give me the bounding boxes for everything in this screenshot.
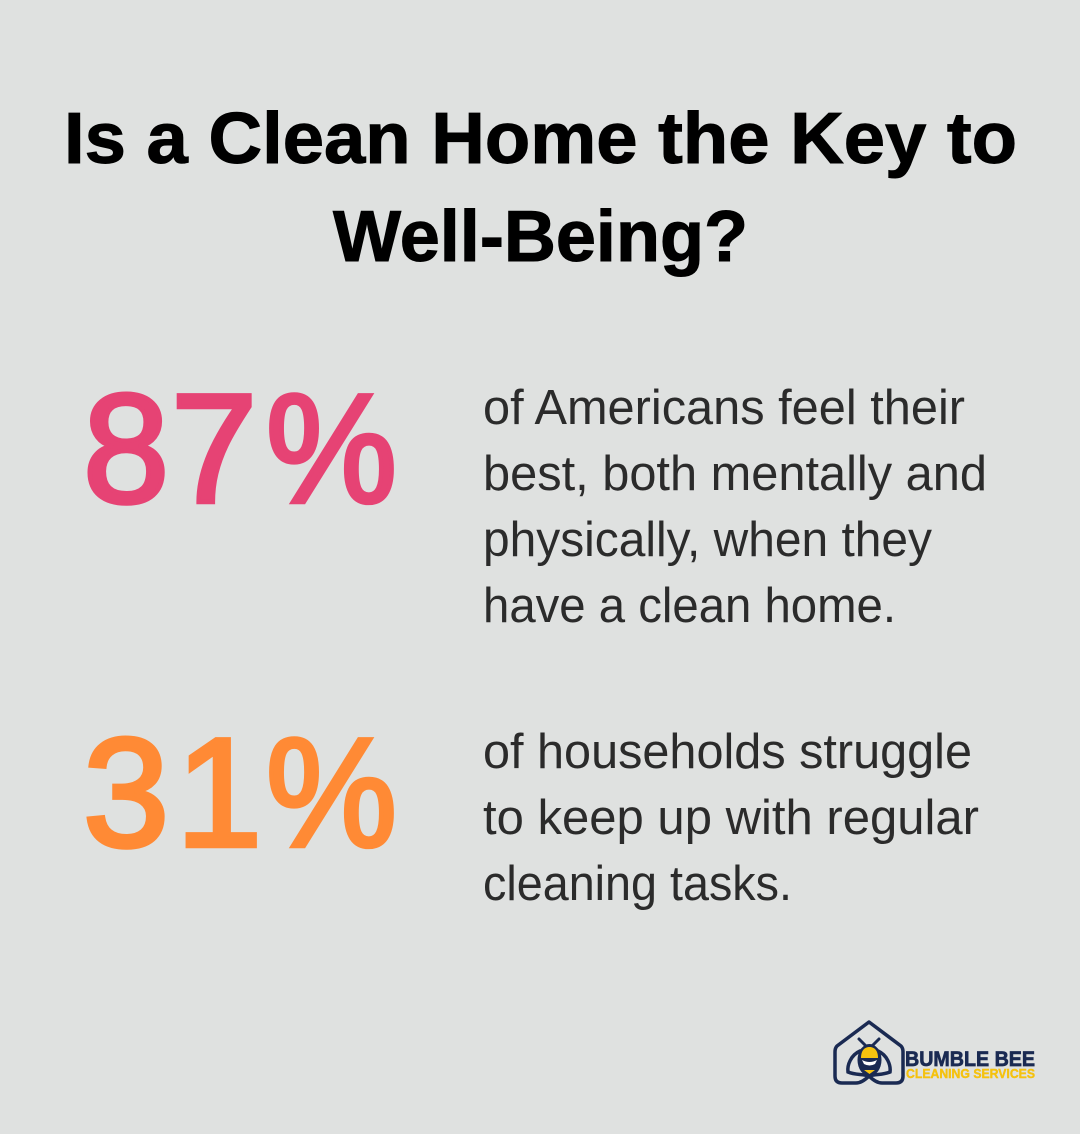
statistic: 31%: 31 <box>83 706 262 879</box>
description: 87% of Americans <box>483 381 987 633</box>
statistic: 87%: 87 <box>83 362 257 535</box>
statistic: 31%: % <box>266 706 397 879</box>
statistic: 31% <box>83 706 397 879</box>
description: 87% of Americans: have a clean home. <box>483 579 896 633</box>
title: Well-Being? <box>333 197 748 277</box>
title <box>64 99 1017 277</box>
statistic: 87% <box>83 362 397 535</box>
description: 87% of Americans: physically, when they <box>483 513 932 567</box>
description: 31% of households: to keep up with regular <box>483 791 979 845</box>
logo tagline: CLEANING SERVICES <box>906 1067 1035 1081</box>
statistic: 87%: % <box>266 362 397 535</box>
description: 31% of households <box>483 725 979 911</box>
description: 31% of households: cleaning tasks. <box>483 857 792 911</box>
title: Is a Clean Home the Key to <box>64 99 1017 179</box>
logo: Bumble Bee Cleaning Services <box>835 1022 1035 1083</box>
description: 87% of Americans: best, both mentally and <box>483 447 987 501</box>
description: 87% of Americans: of Americans feel their <box>483 381 965 435</box>
icon: house outline with bee <box>835 1022 903 1083</box>
logo wordmark: BUMBLE BEE <box>905 1048 1035 1071</box>
description: 31% of households: of households struggle <box>483 725 972 779</box>
